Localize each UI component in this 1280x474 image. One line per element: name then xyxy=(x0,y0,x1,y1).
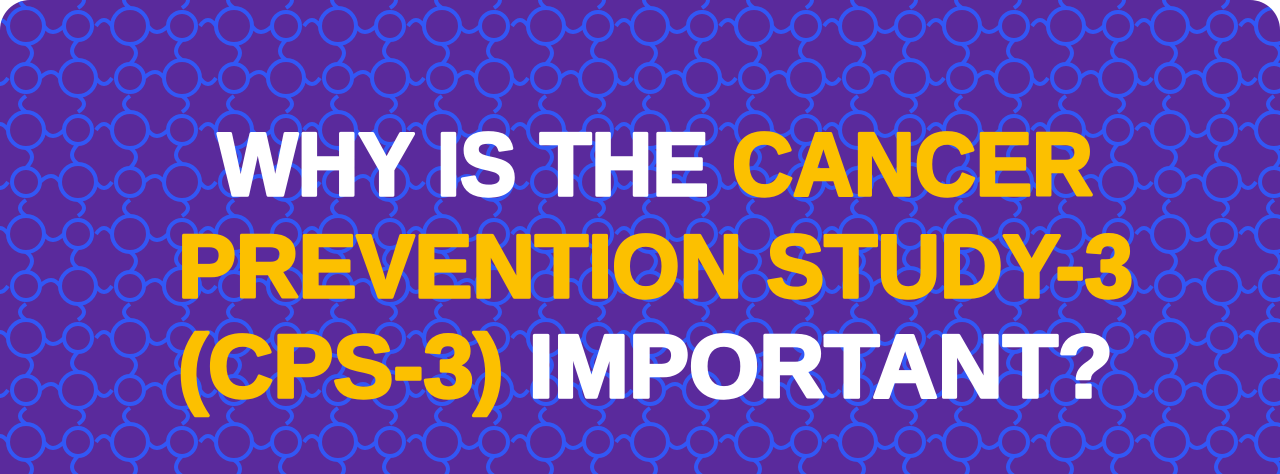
title: PREVENTION STUDY-3 xyxy=(178,216,1133,316)
title xyxy=(178,114,1133,416)
title: (CPS-3) IMPORTANT? xyxy=(178,316,1113,416)
title: WHY IS THE CANCER xyxy=(218,114,1093,214)
